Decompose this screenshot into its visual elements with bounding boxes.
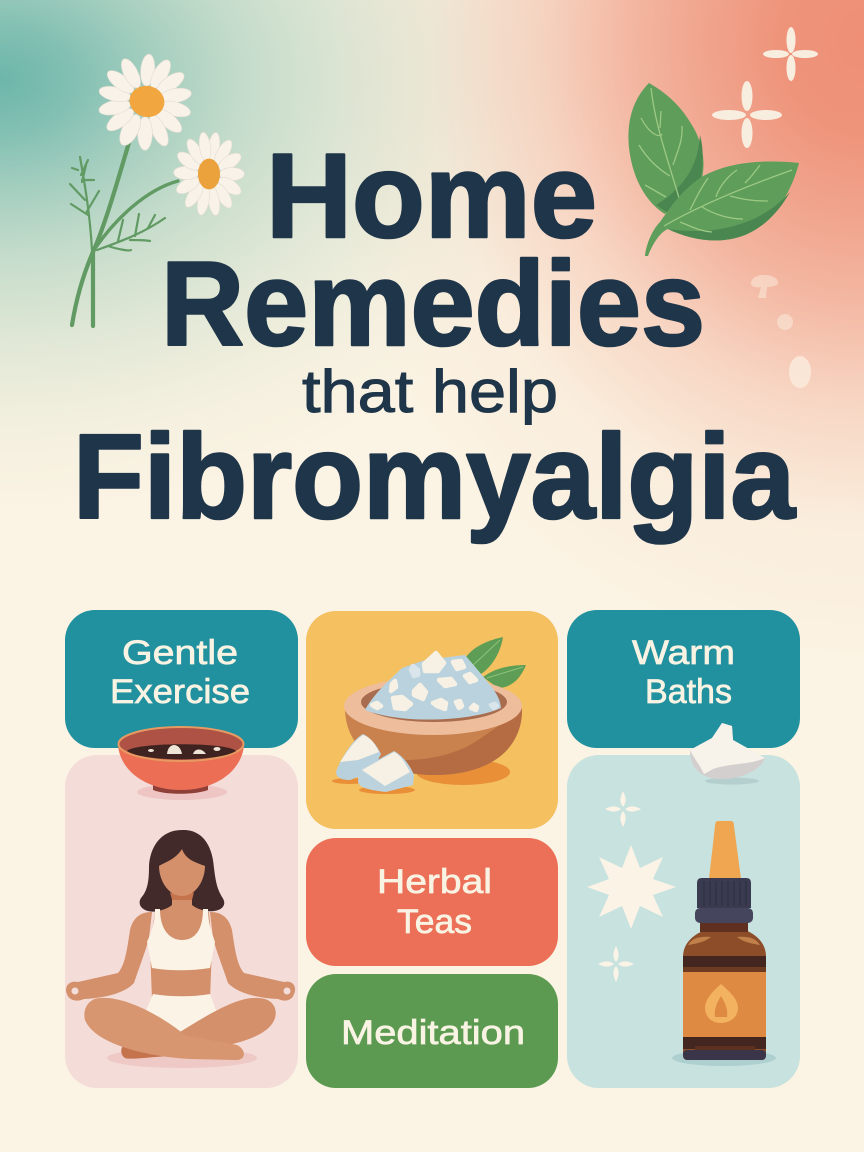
flower lower: [712, 81, 782, 148]
floor shadow: [107, 1048, 257, 1068]
icon: red herbal bowl: [118, 727, 244, 800]
icon: large star: [587, 845, 676, 929]
panel: Warm Baths label: [567, 610, 800, 748]
panel: meditation label: [306, 974, 558, 1088]
panel: Gentle Exercise label: [65, 610, 298, 748]
title line: Home: Home: [266, 129, 597, 263]
icon: dropper bottle: [683, 821, 766, 1060]
bowl: [345, 708, 522, 775]
panel: essential oil: [567, 755, 800, 1088]
icon: green leaves: [628, 83, 799, 256]
icon: chamomile flowers: [70, 54, 244, 326]
bottle shadow: [672, 1050, 776, 1066]
icon: sparkle upper: [605, 791, 641, 827]
flower upper: [763, 27, 818, 81]
title line: Remedies: Remedies: [161, 237, 705, 371]
title line: that help: that help: [302, 358, 558, 425]
icon: leaves behind bowl: [466, 637, 526, 688]
icon: salt chunk: [690, 723, 765, 784]
panel: herbal teas label: [306, 838, 558, 966]
icon: sparkle lower: [598, 946, 634, 982]
bowl shadow: [416, 759, 510, 785]
panel: Warm Baths label: Warm: [632, 634, 735, 672]
stems: [70, 139, 178, 326]
panel: herbal teas label: Teas: [397, 903, 472, 941]
figure: [66, 830, 295, 1060]
panel: meditation figure: [65, 755, 298, 1088]
panel: meditation label: Meditation: [341, 1014, 525, 1052]
panel: Warm Baths label: Baths: [645, 673, 732, 711]
icon: faint herb silhouettes: [751, 275, 811, 388]
daisy small: [173, 131, 244, 217]
icon: small cream flowers: [712, 27, 818, 148]
panel: Gentle Exercise label: Exercise: [110, 673, 250, 711]
salt heap: [365, 655, 501, 720]
panel: herbal teas label: Herbal: [377, 863, 492, 901]
panel: salt bowl: [306, 611, 558, 829]
panel: Gentle Exercise label: Gentle: [122, 634, 238, 672]
loose salt rocks: [332, 734, 415, 794]
daisy large: [98, 54, 193, 150]
arms: [66, 912, 295, 1001]
title line: Fibromyalgia: Fibromyalgia: [73, 410, 796, 544]
title: [73, 129, 796, 544]
